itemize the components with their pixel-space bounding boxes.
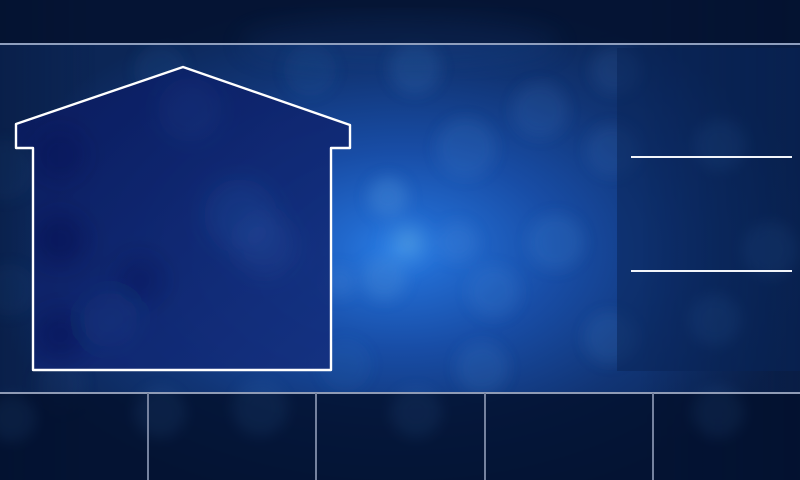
panel divider lower xyxy=(631,270,792,272)
top rule xyxy=(0,43,800,45)
bokeh lights xyxy=(0,42,639,411)
top band xyxy=(0,0,800,70)
panel divider upper xyxy=(631,156,792,158)
right side panel xyxy=(617,48,800,371)
house outline panel xyxy=(16,67,350,370)
bottom band xyxy=(0,380,800,480)
bottom rule and column dividers xyxy=(0,392,800,480)
